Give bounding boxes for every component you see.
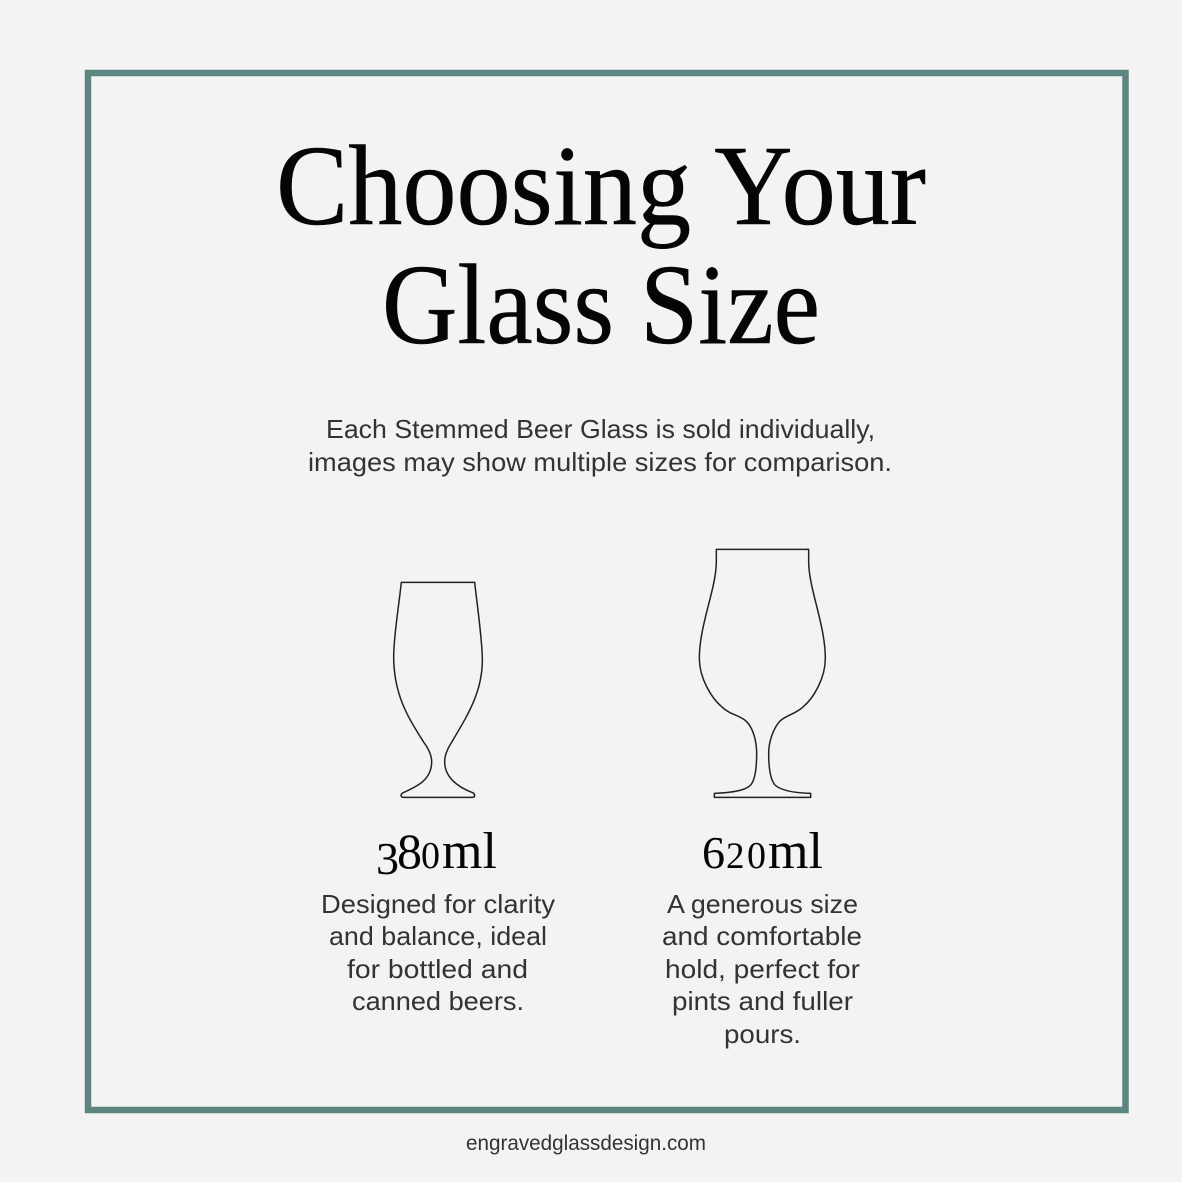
icon: 380ml glass outline <box>394 582 482 797</box>
intro text block: Each Stemmed Beer Glass is sold individually, <box>326 414 875 444</box>
description: 380ml: and balance, ideal <box>329 921 547 951</box>
panel: teal border frame <box>88 73 1126 1110</box>
title: Choosing Your <box>276 122 926 249</box>
footer website: engravedglassdesign.com <box>466 1132 706 1155</box>
size label: 380ml: 0 <box>421 835 440 877</box>
size label: 620ml: 0 <box>747 835 766 877</box>
description: 620ml: A generous size <box>667 889 858 919</box>
size label: 620ml: ml <box>768 823 823 880</box>
description: 380ml: for bottled and <box>347 954 528 984</box>
icon: 620ml glass outline <box>699 549 825 797</box>
description: 620ml: pints and fuller <box>672 986 853 1016</box>
description: 380ml: Designed for clarity <box>321 889 555 919</box>
description: 620ml: and comfortable <box>662 921 862 951</box>
size label: 380ml: 3 <box>376 833 399 884</box>
description: 380ml <box>321 889 555 1016</box>
description: 620ml: pours. <box>724 1019 801 1049</box>
size label: 380ml: ml <box>442 823 497 880</box>
size label: 380ml: 8 <box>397 823 422 879</box>
size label: 620ml: 2 <box>726 836 744 877</box>
description: 620ml <box>662 889 862 1049</box>
title <box>276 122 926 368</box>
intro text block: images may show multiple sizes for comparison. <box>308 447 892 477</box>
title: Glass Size <box>382 241 820 368</box>
description: 620ml: hold, perfect for <box>665 954 860 984</box>
size label: 620ml: 6 <box>702 827 725 878</box>
description: 380ml: canned beers. <box>352 986 524 1016</box>
intro text block <box>308 414 892 477</box>
